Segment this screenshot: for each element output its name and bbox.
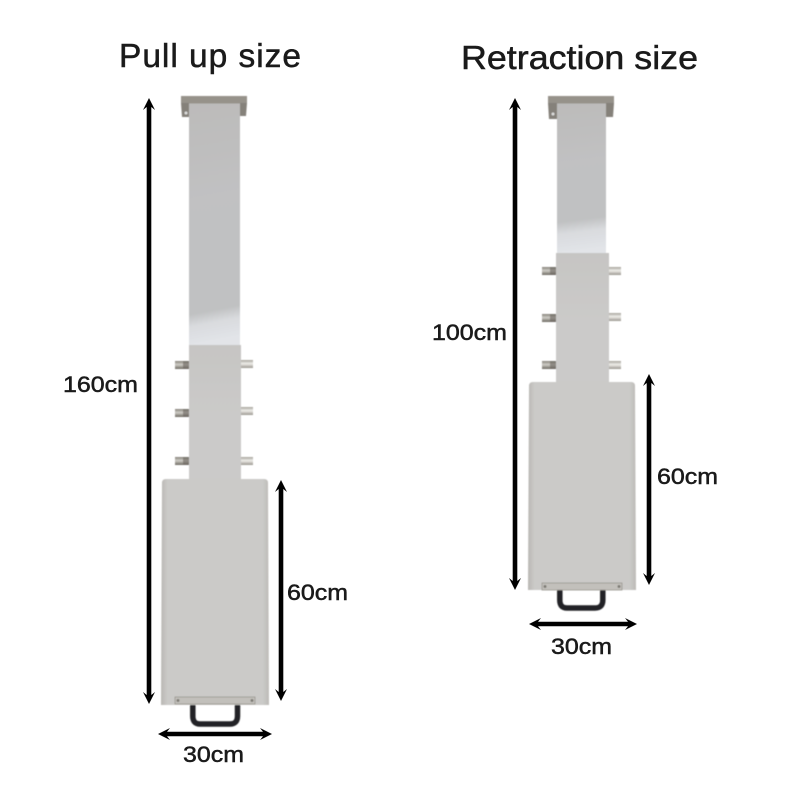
lower panel: [528, 382, 636, 590]
lower panel: [161, 479, 269, 705]
upper tube: [557, 103, 606, 254]
arrow: 60cm panel height, retracted: [643, 374, 655, 585]
label: 60cm extended: 60cm: [287, 580, 348, 605]
pins: [175, 360, 253, 465]
label: 30cm extended: 30cm: [183, 742, 244, 767]
bottom strip: [175, 697, 255, 704]
product: extended bracket: [161, 96, 269, 724]
handle: [193, 705, 238, 724]
label: 160cm: 160cm: [63, 372, 138, 397]
mounting plate: [548, 96, 614, 119]
title: retraction size: Retraction size: [461, 40, 698, 77]
upper tube: [189, 103, 240, 346]
product: retracted bracket: [528, 96, 636, 608]
arrow: 160cm height: [143, 98, 155, 704]
arrow: 30cm width, extended: [158, 728, 272, 740]
label: 30cm retracted: 30cm: [551, 634, 612, 659]
label: 100cm: 100cm: [432, 320, 507, 345]
arrow: 30cm width, retracted: [529, 618, 637, 630]
bottom strip: [542, 583, 622, 590]
label: 60cm retracted: 60cm: [657, 464, 718, 489]
arrow: 60cm panel height, extended: [275, 480, 287, 701]
middle column: [189, 345, 241, 481]
arrow: 100cm height: [509, 98, 521, 590]
mounting plate: [181, 96, 247, 117]
middle column: [556, 253, 609, 384]
pins: [542, 267, 621, 369]
handle: [560, 590, 603, 608]
title: pull up size: Pull up size: [119, 38, 301, 75]
